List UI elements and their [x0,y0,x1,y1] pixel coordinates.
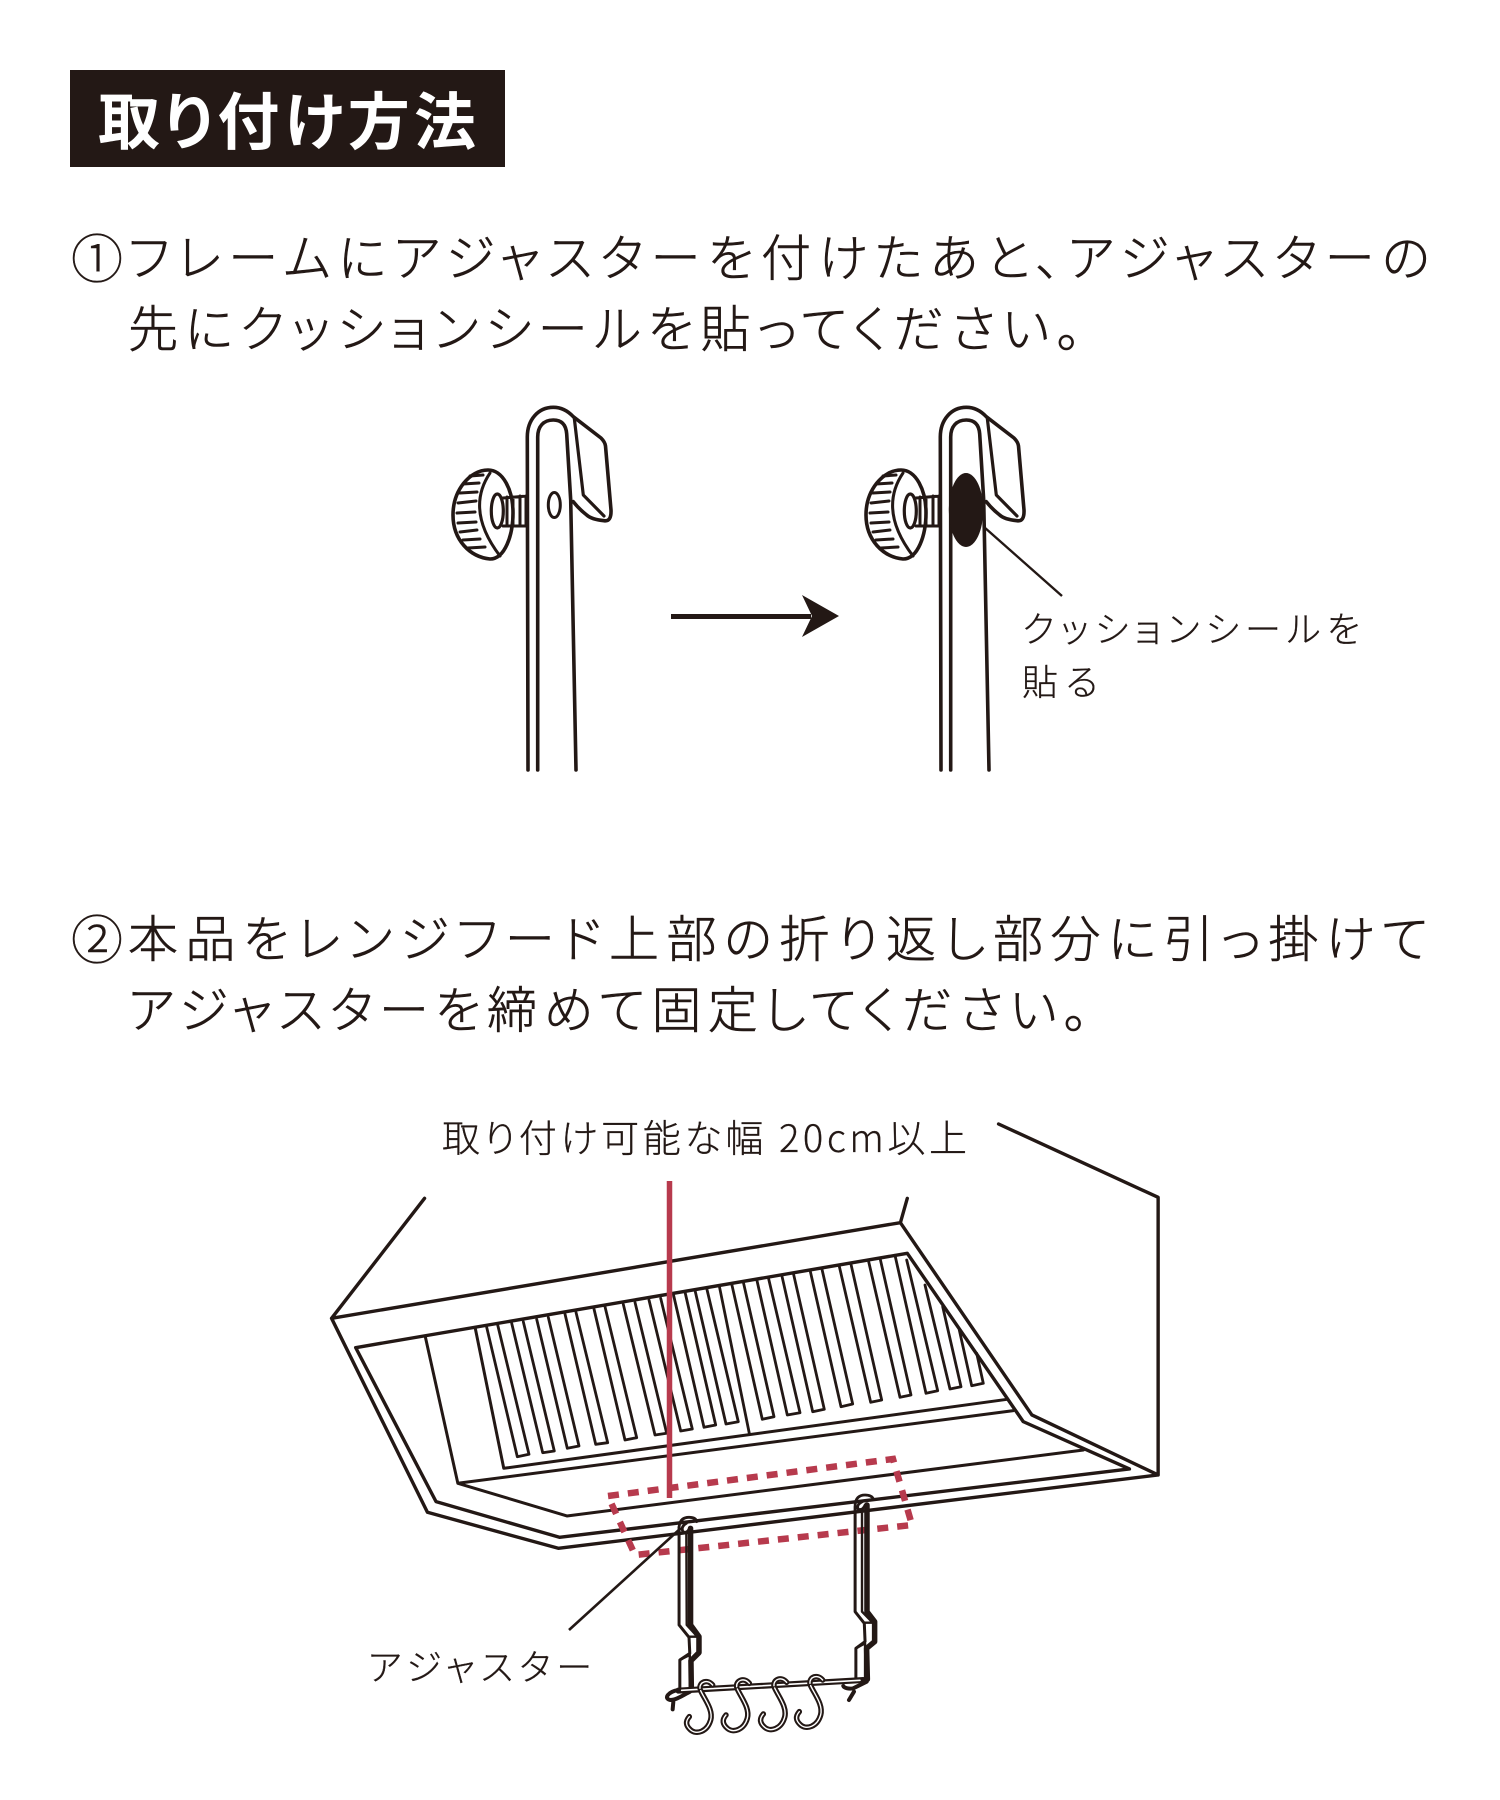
illustration: range hood [332,1124,1158,1548]
S hook 1 [687,1682,713,1732]
S hook 2 [723,1680,749,1731]
title [70,70,505,167]
illustration: adjuster arms [679,1495,875,1688]
cushion seal label: 貼る [1022,662,1098,703]
hood filter slats [487,1255,983,1457]
cushion seal leader line [984,527,1062,596]
red dotted highlight [608,1459,912,1555]
step 1 instruction: フレームにアジャスターを付けたあと、アジャスターの [128,231,1430,287]
width label: 取り付け可能な幅 20cm以上 [442,1108,967,1163]
right arm [855,1495,875,1679]
rack bar [667,1680,867,1709]
step 2 instruction: 本品をレンジフード上部の折り返し部分に引っ掛けて [128,912,1428,968]
adjuster leader line [569,1528,681,1630]
adjuster label: アジャスター [368,1647,592,1688]
illustration: adjuster with cushion seal [866,407,1024,770]
step 2 instruction: ② [71,913,123,971]
step 1 instruction [71,231,1430,358]
arrow [671,595,839,637]
S hook 3 [761,1679,787,1730]
title: 取り付け方法 [98,89,476,158]
illustration: adjuster before [453,407,611,770]
S hook 4 [797,1677,823,1727]
red width marker line [667,1181,672,1498]
step 1 instruction: 先にクッションシールを貼ってください。 [128,302,1081,358]
step 1 instruction: ① [71,232,123,290]
left arm [679,1517,699,1688]
step 2 instruction [71,912,1428,1039]
cushion seal label: クッションシールを [1022,609,1360,650]
step 2 instruction: アジャスターを締めて固定してください。 [128,983,1088,1039]
rack bar and S hooks [667,1677,867,1732]
